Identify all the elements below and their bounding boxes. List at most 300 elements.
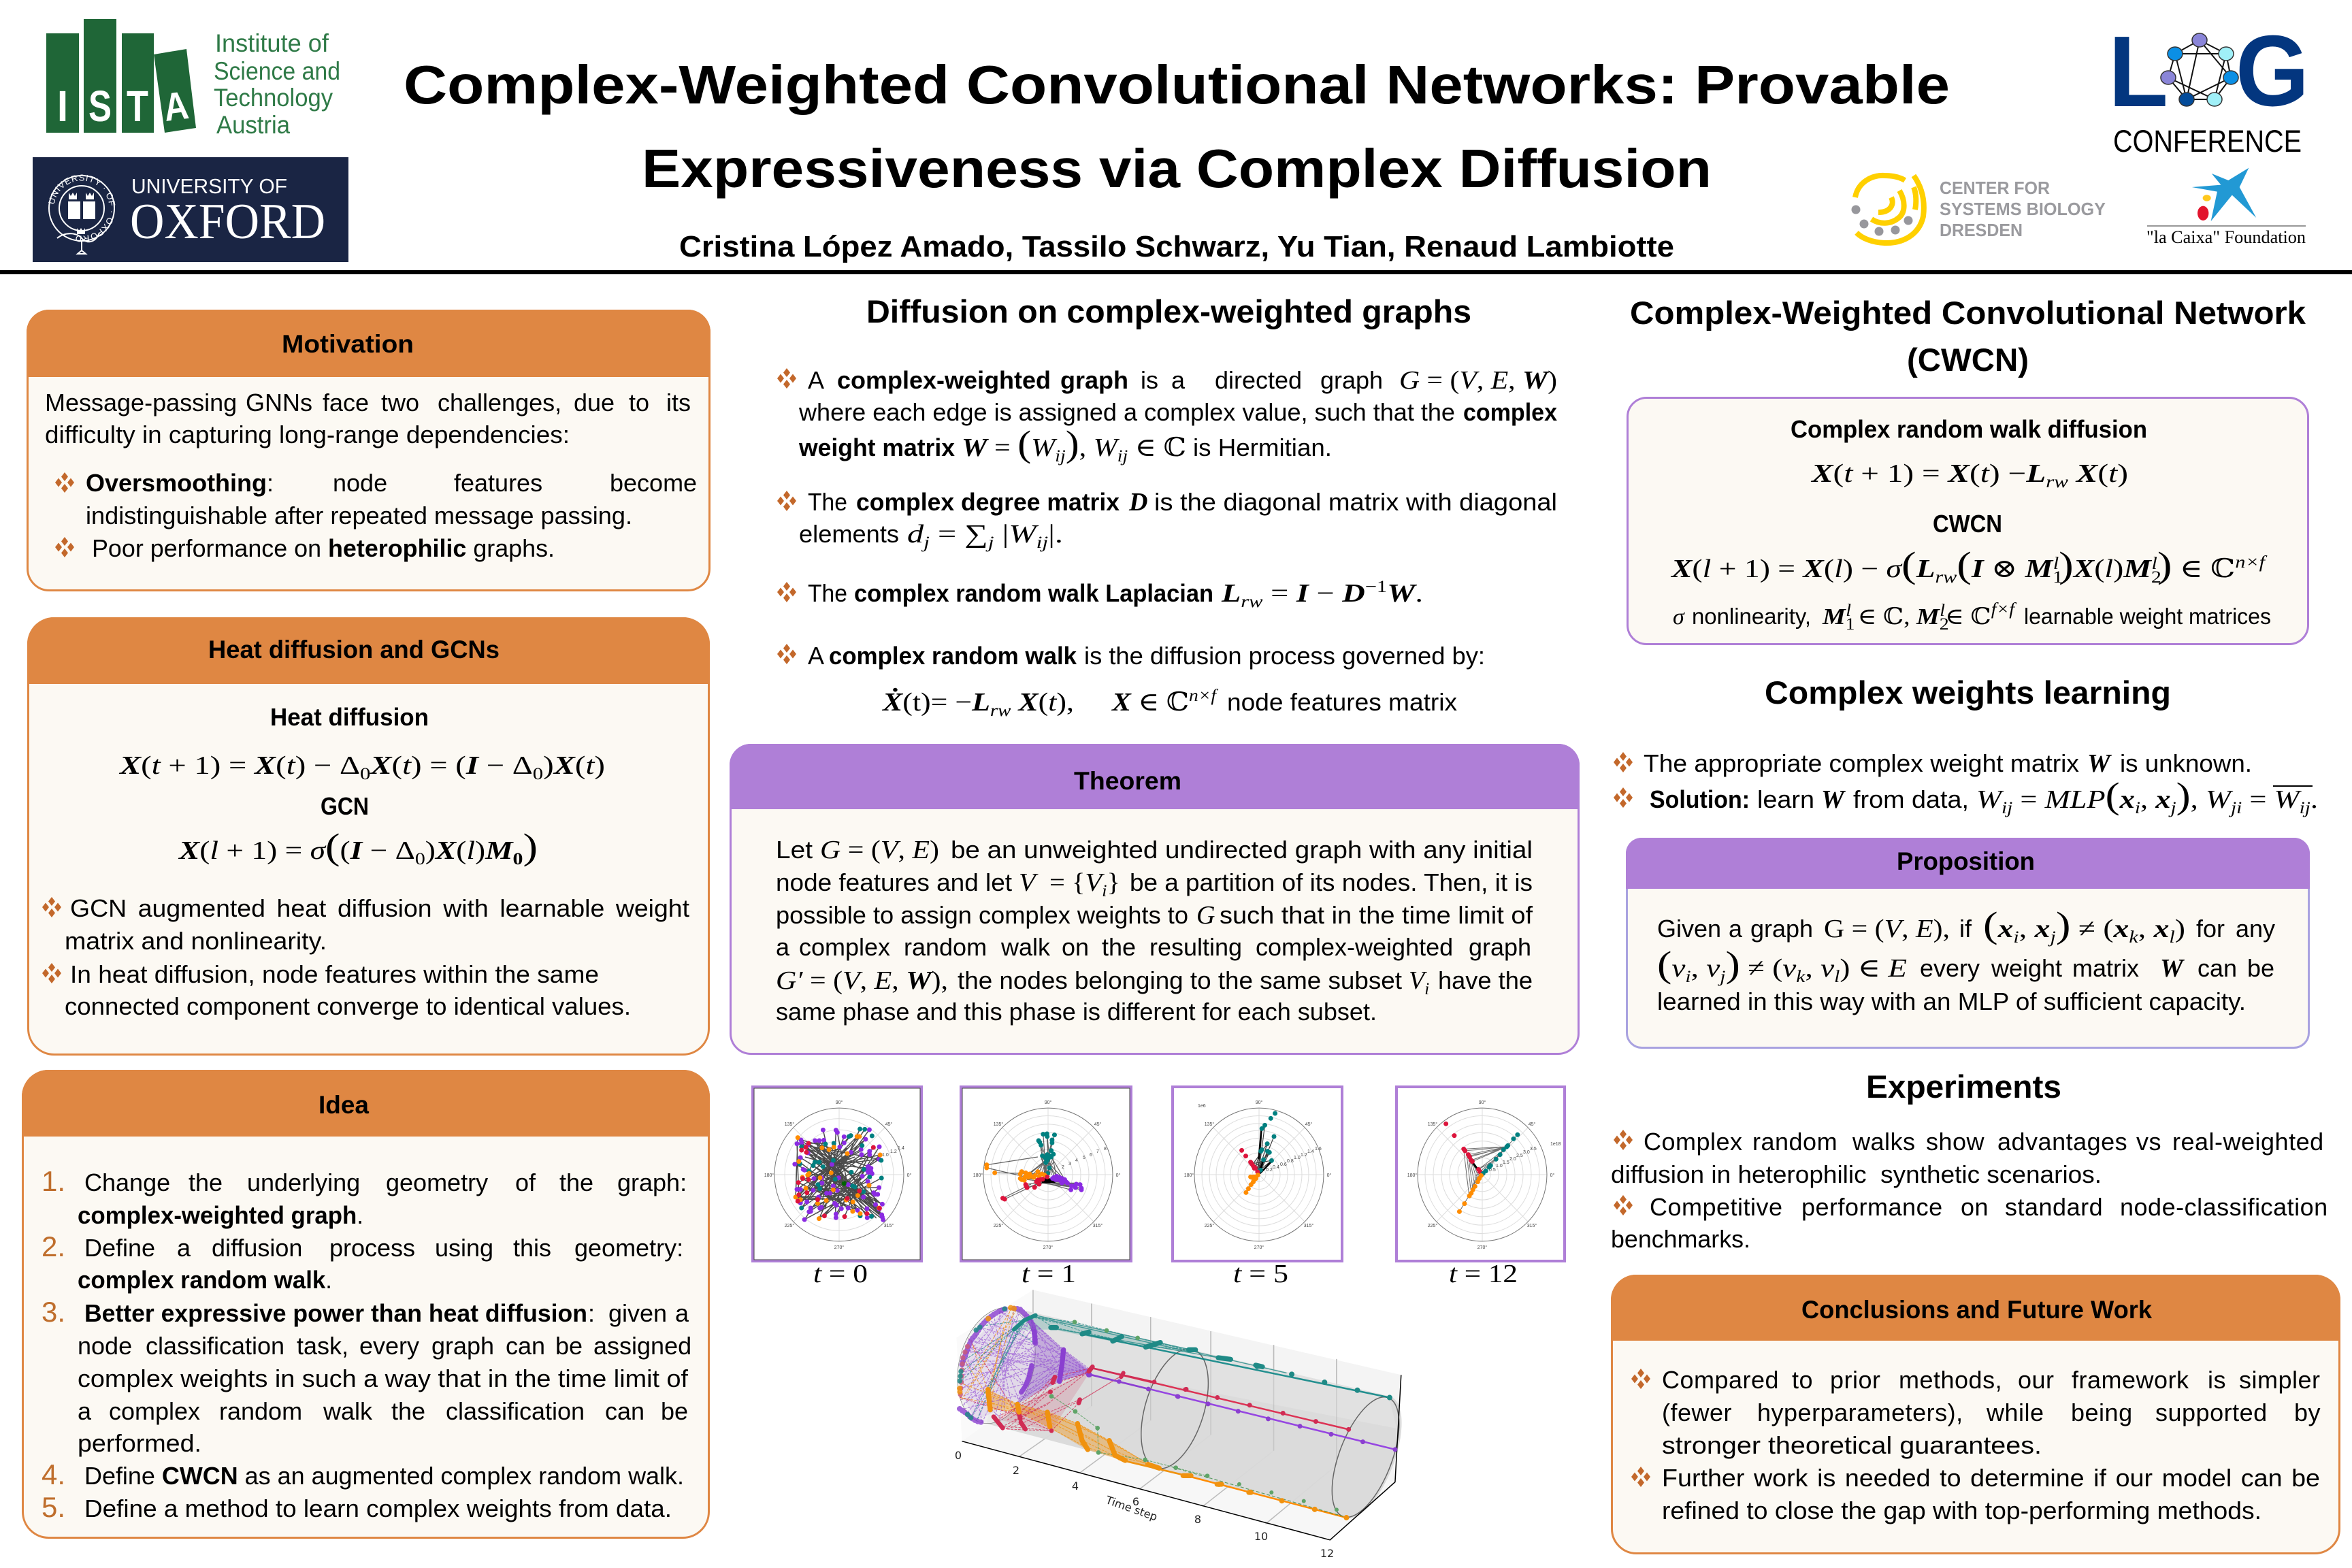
list item 2: using: [435, 1234, 493, 1262]
text: proposition statement: every: [1920, 954, 1980, 982]
equation: random walk diffusion: (t): [2097, 459, 2126, 488]
panel: CWCN equations: l: [1846, 602, 1851, 620]
equation: heat diffusion: X(t): [554, 751, 603, 780]
panel: idea: [22, 1070, 710, 1538]
text: proposition statement: (v: [1657, 944, 1683, 985]
bullet: simpler framework: (fewer: [1662, 1399, 1732, 1426]
text: theorem statement: random: [904, 933, 987, 961]
text: intro: face: [323, 389, 369, 416]
text: theorem statement: complex: [799, 933, 890, 961]
equation: heat diffusion: ): [543, 751, 554, 780]
chart: polar plot t=12: 45°: [1529, 1122, 1535, 1127]
panel: motivation: [27, 310, 710, 591]
logo: Center for Systems Biology Dresden: CENTER FOR: [1940, 178, 2050, 198]
text: proposition statement: can: [2198, 954, 2237, 982]
chart: polar plot t=5: 225°: [1205, 1223, 1214, 1228]
equation: heat diffusion: X: [370, 751, 393, 780]
panel: heat diffusion and GCNs: [27, 617, 710, 1055]
bullet: complex-weighted graph: a: [1171, 366, 1186, 394]
bullet: complex degree matrix: complex degree matrix: [856, 488, 1120, 516]
bullet: solution: from data,: [1853, 785, 1969, 813]
label: t = 0: t = 0: [813, 1260, 868, 1288]
panel: theorem: [730, 744, 1580, 1054]
bullet: synthetic scenarios: random: [1752, 1128, 1838, 1156]
chart: polar plot t=1: 7: [1096, 1149, 1099, 1154]
text: proposition statement: k: [2129, 928, 2139, 947]
bullet: complex-weighted graph: ij: [1055, 447, 1066, 466]
text: intro: Message-passing: [45, 389, 237, 416]
bullet: complex-weighted graph: complex-weighted: [837, 366, 1051, 394]
list item 3: walk: [323, 1397, 373, 1425]
text: proposition statement: l: [1834, 968, 1840, 986]
subheading: CWCN: CWCN: [1933, 510, 2002, 538]
list item 3: 3.: [42, 1296, 65, 1328]
heading: heat diffusion and GCNs: Heat diffusion and GCNs: [208, 636, 500, 664]
list item 1: geometry: [386, 1169, 488, 1196]
bullet: oversmoothing: indistinguishable after repeated message passing.: [86, 502, 632, 529]
list item 3: be: [661, 1397, 688, 1425]
logo: ISTA: T: [127, 82, 148, 131]
chart: polar plot t=1: 6: [1090, 1153, 1092, 1158]
chart: polar plot t=12: 3.5: [1530, 1147, 1537, 1152]
bullet: solution: [1614, 775, 2318, 817]
list item 3: a: [78, 1397, 92, 1425]
text: proposition statement: any: [2236, 915, 2275, 943]
chart: polar plot t=12: 2.5: [1516, 1154, 1523, 1158]
text: proposition statement: weight: [1991, 954, 2062, 982]
list item 1: the: [189, 1169, 223, 1196]
bullet: unknown matrix: The appropriate complex weight matrix: [1644, 749, 2079, 777]
chart: polar plot t=12: 1.0: [1496, 1164, 1503, 1169]
chart: polar plot t=12: 0.5: [1489, 1168, 1496, 1173]
list item 1: underlying: [247, 1169, 360, 1196]
bullet: GCN augmented: [42, 894, 689, 955]
list item 1: Change: [84, 1169, 170, 1196]
panel: CWCN equations: M: [1916, 604, 1941, 630]
bullet: GCN augmented: GCN augmented heat diffusion with learnable weight: [70, 894, 689, 922]
equation: CWCN: 2: [2151, 568, 2161, 587]
logo: ISTA: Technology: [214, 84, 333, 112]
equation: CWCN: X(l + 1) = X(l) − σ(L: [1671, 544, 1932, 585]
text: theorem statement: same phase and this phase is different for each subset.: [776, 998, 1377, 1026]
bullet: heat diffusion convergence: connected component converge to identical values.: [65, 992, 631, 1020]
bullet: simpler framework: is: [2208, 1366, 2226, 1394]
logo: University of Oxford: UNIVERSITY · OF · OXFORD: [48, 174, 116, 242]
text: theorem statement: complex-weighted: [1256, 933, 1453, 961]
bullet: benchmarks: on: [1961, 1193, 1989, 1221]
logo: ISTA: Austria: [216, 111, 290, 139]
equation: complex random walk: X ∈ ℂ: [1112, 688, 1183, 717]
list item 3: :: [588, 1299, 595, 1327]
list item 3: performed.: [78, 1429, 201, 1457]
bullet: complex degree matrix: elements: [799, 520, 899, 548]
equation: random walk diffusion: X: [2076, 459, 2099, 488]
panel: CWCN equations: [1628, 397, 2308, 644]
bullet: simpler framework: stronger theoretical guarantees.: [1662, 1431, 2042, 1459]
list item 3: a: [675, 1299, 689, 1327]
text: proposition statement: x: [2153, 915, 2169, 943]
chart: polar plot t=1: 45°: [1094, 1122, 1101, 1127]
chart: polar plot t=5: [1173, 1087, 1342, 1261]
logo: LoG conference: L: [2108, 16, 2168, 128]
bullet: simpler framework: our: [2018, 1366, 2055, 1394]
list item 3: can: [605, 1397, 644, 1425]
chart: polar plot t=5: 1.4: [1307, 1149, 1314, 1154]
text: proposition statement: j: [2048, 928, 2056, 947]
list item 3: classification: [446, 1397, 585, 1425]
equation: GCN: 0: [513, 850, 523, 868]
logo: University of Oxford: UNIVERSITY OF: [131, 174, 287, 198]
bullet: solution: learn: [1757, 785, 1814, 813]
title: Expressiveness via Complex Diffusion: [642, 138, 1712, 199]
bullet: synthetic scenarios: advantages: [1997, 1128, 2127, 1156]
bullet: simpler framework: methods,: [1899, 1366, 2002, 1394]
bullet: random walk laplacian: complex random walk Laplacian: [854, 579, 1213, 607]
label: t = 1: t = 1: [1022, 1260, 1076, 1288]
text: intro: two: [381, 389, 419, 416]
text: intro line 2: difficulty in capturing long-range dependencies:: [45, 421, 570, 448]
title: Complex-Weighted Convolutional Networks: Provable: [404, 54, 1950, 115]
equation: CWCN: (: [1957, 544, 1972, 585]
equation: GCN: X(l + 1) = σ((I − Δ: [179, 826, 406, 867]
bullet: solution: i: [2135, 799, 2140, 817]
authors: Cristina López Amado, Tassilo Schwarz, Yu Tian, Renaud Lambiotte: [679, 230, 1674, 263]
text: proposition statement: graph: [1750, 915, 1813, 943]
logo: Center for Systems Biology Dresden: [1851, 176, 2106, 243]
text: theorem statement: such that in the time limit of: [1220, 901, 1533, 929]
chart: polar plot t=12: 315°: [1527, 1223, 1537, 1228]
panel: CWCN equations: nonlinearity,: [1692, 604, 1811, 629]
panel: CWCN equations: ∈ ℂ,: [1851, 604, 1916, 630]
bullet: complex-weighted graph: ij: [1117, 447, 1128, 466]
chart: polar plot t=0: 135°: [785, 1122, 794, 1127]
text: theorem statement: graph: [1469, 933, 1531, 961]
equation: GCN: ): [425, 836, 436, 865]
equation: heat diffusion: 0: [533, 765, 543, 783]
text: theorem statement: a: [776, 933, 790, 961]
panel: CWCN equations: M: [1822, 604, 1847, 630]
text: theorem statement: the nodes belonging to the same subset: [958, 966, 1402, 994]
equation: CWCN: 1: [2053, 568, 2063, 587]
text: theorem statement: on: [1062, 933, 1089, 961]
bullet: solution: W: [2274, 785, 2302, 814]
text: theorem statement: resulting: [1149, 933, 1242, 961]
chart: polar plot t=12: 225°: [1428, 1223, 1437, 1228]
chart: polar plot t=0: [753, 1087, 921, 1261]
bullet: solution: MLP(x: [2045, 775, 2133, 816]
list item 1: the: [559, 1169, 593, 1196]
equation: heat diffusion: (t) = ( I − Δ: [392, 751, 523, 780]
bullet: synthetic scenarios: walks: [1852, 1128, 1916, 1156]
list item 3: be: [555, 1332, 583, 1360]
subheading: heat diffusion: Heat diffusion: [270, 703, 429, 731]
chart: polar plot t=5: 1e6: [1198, 1104, 1206, 1109]
heading: motivation: Motivation: [282, 330, 414, 358]
chart: polar plot t=0: 225°: [785, 1223, 794, 1228]
list item 2: complex random walk.: [78, 1266, 332, 1294]
list item 1: of: [515, 1169, 536, 1196]
bullet: complex-weighted graph: directed: [1215, 366, 1302, 394]
text: proposition statement: v: [1820, 954, 1834, 983]
bullet: complex-weighted graph: ): [1066, 423, 1079, 464]
bullet: complex degree matrix: The: [808, 488, 847, 516]
list item 2: a: [177, 1234, 191, 1262]
bullet: solution: =: [2012, 785, 2045, 814]
bullet: solution: ij: [2300, 799, 2310, 817]
chart: polar plot t=1: 4: [1075, 1158, 1078, 1163]
bullet: synthetic scenarios: diffusion in heterophilic synthetic scenarios.: [1611, 1160, 2102, 1188]
bullet: complex-weighted graph: A: [808, 366, 824, 394]
list item 3: random: [219, 1397, 302, 1425]
chart: polar plot t=12: 1.5: [1503, 1160, 1509, 1165]
chart: polar plot t=5: 180°: [1184, 1173, 1194, 1178]
panel: CWCN equations: 1: [1846, 615, 1855, 634]
label: t = 5: t = 5: [1233, 1260, 1288, 1288]
panel: CWCN equations: 2: [1940, 615, 1949, 634]
list item 3: classification: [146, 1332, 284, 1360]
bullet: benchmarks: benchmarks.: [1611, 1225, 1750, 1253]
list item 1: [42, 1165, 687, 1229]
list item 3: task,: [297, 1332, 348, 1360]
equation: GCN: ): [523, 826, 538, 867]
logo: ISTA: [46, 19, 340, 139]
chart: polar plot t=5: 1.6: [1315, 1147, 1322, 1152]
text block: experiments: [1611, 1128, 2328, 1253]
list item 2: 2.: [42, 1230, 65, 1262]
bullet: synthetic scenarios: real-weighted: [2172, 1128, 2324, 1156]
bullet: solution: W: [1821, 785, 1846, 814]
bullet: complex random walk: [777, 642, 1485, 670]
bullet: complex random walk: is the diffusion process governed by:: [1084, 642, 1485, 670]
equation: GCN: 0: [415, 850, 425, 868]
text: theorem statement: be a partition of its nodes. Then, it is: [1130, 868, 1533, 896]
text: theorem statement: V: [1409, 966, 1427, 995]
logo: Center for Systems Biology Dresden: DRESDEN: [1940, 220, 2023, 240]
equation: CWCN: I ⊗ M: [1972, 555, 2048, 583]
heading: theorem: Theorem: [1074, 767, 1181, 795]
bullet: random walk laplacian: rw: [1241, 593, 1263, 611]
text: theorem statement: i: [1102, 882, 1107, 900]
bullet: solution: x: [2155, 785, 2170, 814]
bullet: complex-weighted graph: graph: [1060, 366, 1128, 394]
chart: polar plot t=12: 3.0: [1523, 1150, 1530, 1155]
bullet: solution: ): [2176, 775, 2191, 816]
chart: polar plot t=5: 0.2: [1266, 1168, 1273, 1173]
bullet: complex-weighted graph: is Hermitian.: [1193, 434, 1332, 461]
bullet: complex-weighted graph: weight matrix: [798, 434, 955, 461]
bullet: complex random walk: A: [808, 642, 824, 670]
chart: polar plot t=0: 180°: [764, 1173, 774, 1178]
chart: polar plot t=12: 0°: [1550, 1173, 1555, 1178]
list item 3: Better expressive power than heat diffusion: [84, 1299, 587, 1327]
text block: definitions: [777, 366, 1557, 722]
text: proposition statement: ≠ ( x: [2077, 915, 2127, 943]
chart: polar plot t=1: 90°: [1045, 1100, 1051, 1105]
chart: polar plot t=12: 1e18: [1550, 1142, 1561, 1147]
list item 3: can: [506, 1332, 545, 1360]
chart: polar plot t=1: 3: [1068, 1162, 1071, 1166]
text: proposition statement: W: [2160, 954, 2185, 983]
chart: polar plot t=5: 45°: [1305, 1122, 1312, 1127]
equation: complex random walk: [882, 687, 1457, 722]
bullet: GCN augmented: matrix and nonlinearity.: [65, 927, 327, 955]
bullet: random walk laplacian: [777, 578, 1423, 611]
text: theorem statement: i: [1424, 980, 1429, 998]
equation: heat diffusion: 0: [360, 765, 370, 783]
chart: polar plot t=5: 90°: [1256, 1100, 1262, 1105]
bullet: random walk laplacian: −1: [1365, 578, 1387, 596]
text: theorem statement: Let: [776, 836, 813, 864]
bullet: simpler framework: by: [2294, 1399, 2321, 1426]
bullet: complex-weighted graph: graph: [1320, 366, 1383, 394]
logo: LoG conference: [2108, 15, 2309, 159]
bullet: heat diffusion convergence: [42, 960, 631, 1020]
bullet: complex-weighted graph: G = (V, E, W): [1399, 366, 1557, 395]
text: proposition statement: j: [1718, 968, 1726, 986]
list item 5: 5.: [42, 1491, 65, 1523]
text: proposition statement: be: [2247, 954, 2274, 982]
subheading: GCN: GCN: [321, 792, 369, 820]
chart: polar plot t=1: 180°: [973, 1173, 983, 1178]
logo: University of Oxford: OXFORD: [130, 194, 325, 250]
text: proposition statement: ,: [2019, 915, 2035, 943]
list item 3: every: [359, 1332, 419, 1360]
list item 1: complex-weighted graph.: [78, 1201, 363, 1229]
bullet: simpler framework: being: [2071, 1399, 2133, 1426]
bullet: random walk laplacian: W: [1387, 579, 1418, 608]
chart: polar plot t=5: 1.2: [1301, 1153, 1307, 1158]
chart: polar plot t=5: 0.4: [1273, 1165, 1279, 1170]
bullet: synthetic scenarios: show: [1926, 1128, 1985, 1156]
text: proposition statement: ): [2056, 904, 2070, 945]
text: intro: GNNs: [246, 389, 312, 416]
bullet: solution: .: [2310, 785, 2318, 814]
label: t = 12: t = 12: [1449, 1260, 1518, 1288]
logo: ISTA: Science and: [214, 57, 340, 85]
bullet: synthetic scenarios: [1611, 1128, 2324, 1188]
header rule: [0, 270, 2352, 274]
text: proposition statement: matrix: [2072, 954, 2139, 982]
bullet: complex degree matrix: W: [1009, 520, 1039, 549]
panel: CWCN equations: l: [1940, 602, 1945, 620]
chart: polar plot t=5: 315°: [1304, 1223, 1313, 1228]
list item 2: this: [513, 1234, 551, 1262]
logo: LoG conference: G: [2236, 15, 2309, 127]
equation: CWCN: l: [2152, 555, 2157, 573]
equation: CWCN: rw: [1936, 568, 1957, 587]
text: theorem statement: G = (V, E): [820, 836, 939, 864]
bullet: synthetic scenarios: Complex: [1644, 1128, 1743, 1156]
chart: polar plot t=0: 315°: [884, 1223, 894, 1228]
list item 2: geometry:: [574, 1234, 683, 1262]
equation: CWCN: n×f: [2235, 553, 2268, 572]
list item 5: Define a method to learn complex weights from data.: [84, 1494, 672, 1522]
panel: conclusions and future work: [1611, 1275, 2340, 1553]
equation: CWCN: ∈ ℂ: [2178, 555, 2225, 583]
text: theorem statement: possible to assign complex weights to: [776, 901, 1188, 929]
bullet: complex-weighted graph: ∈ ℂ: [1128, 434, 1186, 462]
chart: polar plot t=5: 270°: [1254, 1245, 1264, 1250]
bullet: random walk laplacian: L: [1221, 579, 1241, 608]
chart: polar plot t=1: [961, 1087, 1131, 1261]
axis tick labels: 2: [1013, 1464, 1019, 1477]
chart: polar plot t=1: 135°: [994, 1122, 1003, 1127]
text: intro: to: [629, 389, 649, 416]
bullet: complex degree matrix: |.: [1048, 520, 1063, 549]
equation: complex random walk: X: [1017, 688, 1040, 717]
text: proposition statement: x: [2034, 915, 2050, 943]
logo: University of Oxford: [33, 157, 348, 262]
bullet: random walk laplacian: I − D: [1296, 579, 1361, 608]
text: proposition statement: v: [1706, 954, 1720, 983]
chart: polar plot t=12: 135°: [1428, 1122, 1437, 1127]
panel: proposition: [1626, 838, 2310, 1048]
panel: CWCN equations: learnable weight matrices: [2024, 604, 2271, 629]
heading: proposition: Proposition: [1897, 847, 2035, 875]
equation: complex random walk: n×f: [1189, 687, 1218, 705]
list item 2: [42, 1230, 683, 1294]
panel: CWCN equations: f×f: [1991, 600, 2016, 619]
logo: la Caixa Foundation: "la Caixa" Foundation: [2146, 227, 2306, 247]
text: proposition statement: l: [2169, 928, 2175, 947]
chart: polar plot t=1: 5: [1083, 1156, 1085, 1160]
bullet: complex-weighted graph: , W: [1079, 434, 1115, 462]
chart: polar plot t=0: 0°: [907, 1173, 912, 1178]
equation: heat diffusion: X(t + 1) = X(t) − Δ: [120, 751, 348, 780]
text: proposition statement: if: [1959, 915, 1972, 943]
text: intro: its: [666, 389, 691, 416]
text: proposition statement: (x: [1983, 904, 2011, 945]
text: proposition statement: ) ∈: [1840, 954, 1888, 983]
bullet: further work: [1631, 1464, 2320, 1524]
chart: 3D complex diffusion cylinder: [945, 1290, 1412, 1560]
bullet: complex-weighted graph: complex: [1463, 398, 1557, 426]
bullet: complex degree matrix: j: [985, 534, 994, 552]
heading: conclusions: Conclusions and Future Work: [1801, 1296, 2152, 1324]
axis tick labels: 10: [1254, 1530, 1268, 1543]
list item 4: 4.: [42, 1458, 65, 1490]
bullet: complex degree matrix: |: [994, 520, 1009, 549]
bullet: solution: ji: [2228, 799, 2242, 817]
list item 3: complex weights in such a way that in the time limit of: [78, 1365, 689, 1392]
list item 2: diffusion: [212, 1234, 302, 1262]
text: theorem statement: walk: [1000, 933, 1051, 961]
text: intro: due: [574, 389, 615, 416]
bullet: solution: =: [2242, 785, 2274, 814]
bullet: solution: , W: [2191, 785, 2227, 814]
bullet: random walk laplacian: =: [1263, 579, 1296, 608]
bullet: complex degree matrix: D: [1128, 488, 1147, 517]
bullet: heat diffusion convergence: In heat diffusion, node features within the same: [70, 960, 599, 988]
logo: la Caixa Foundation: [2146, 168, 2306, 247]
text: proposition statement: G = (V, E),: [1824, 915, 1950, 943]
chart: polar plot t=1: 2: [1062, 1165, 1064, 1170]
chart: polar plot t=5: 135°: [1205, 1122, 1214, 1127]
equation: random walk diffusion: rw: [2046, 473, 2068, 491]
chart: polar plot t=5: 0°: [1327, 1173, 1332, 1178]
bullet: oversmoothing: [55, 469, 697, 529]
list item 1: graph:: [617, 1169, 687, 1196]
bullet: complex degree matrix: j: [921, 534, 930, 552]
text: proposition statement: E: [1887, 954, 1907, 983]
text: theorem statement: }: [1107, 868, 1120, 897]
chart: polar plot t=0: 270°: [834, 1245, 844, 1250]
chart: polar plot t=0: 1.0: [882, 1153, 889, 1158]
logo: ISTA: S: [88, 82, 112, 131]
list item 4: Define CWCN as an augmented complex random walk.: [84, 1462, 684, 1490]
equation: CWCN: ): [2157, 544, 2172, 585]
bullet: complex-weighted graph: is: [1141, 366, 1158, 394]
